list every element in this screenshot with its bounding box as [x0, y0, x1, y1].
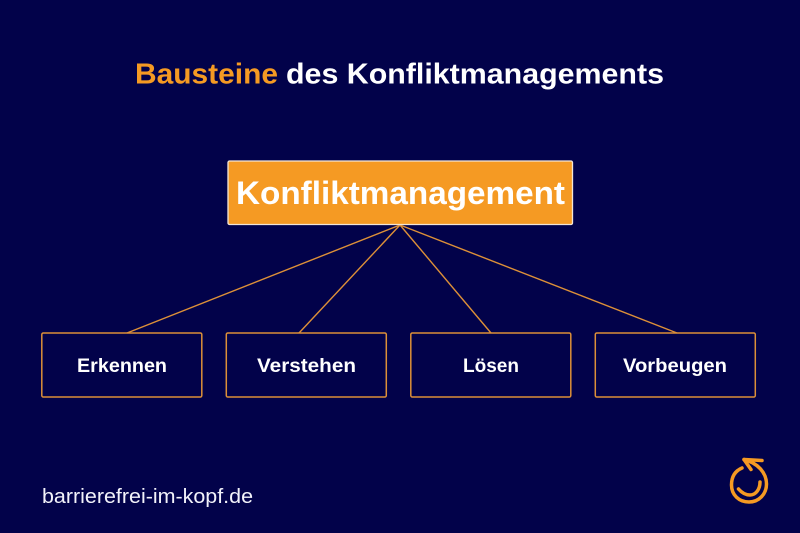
box: Verstehen: Verstehen [257, 355, 356, 377]
main box: Konfliktmanagement: Konfliktmanagement [236, 175, 565, 211]
website address: barrierefrei-im-kopf.de [42, 486, 253, 508]
main box: Konfliktmanagement [228, 161, 572, 224]
box: Erkennen [42, 333, 202, 397]
box: Lösen: Lösen [463, 355, 519, 377]
box: Vorbeugen: Vorbeugen [623, 355, 727, 377]
box: Lösen [411, 333, 571, 397]
title: des Konfliktmanagements [286, 58, 664, 90]
box: Verstehen [226, 333, 386, 397]
box: Vorbeugen [595, 333, 755, 397]
connector lines [127, 225, 677, 333]
title [135, 58, 664, 90]
title: Bausteine [135, 58, 278, 90]
icon: smiling circular arrow logo [732, 460, 766, 502]
box: Erkennen: Erkennen [77, 355, 167, 377]
